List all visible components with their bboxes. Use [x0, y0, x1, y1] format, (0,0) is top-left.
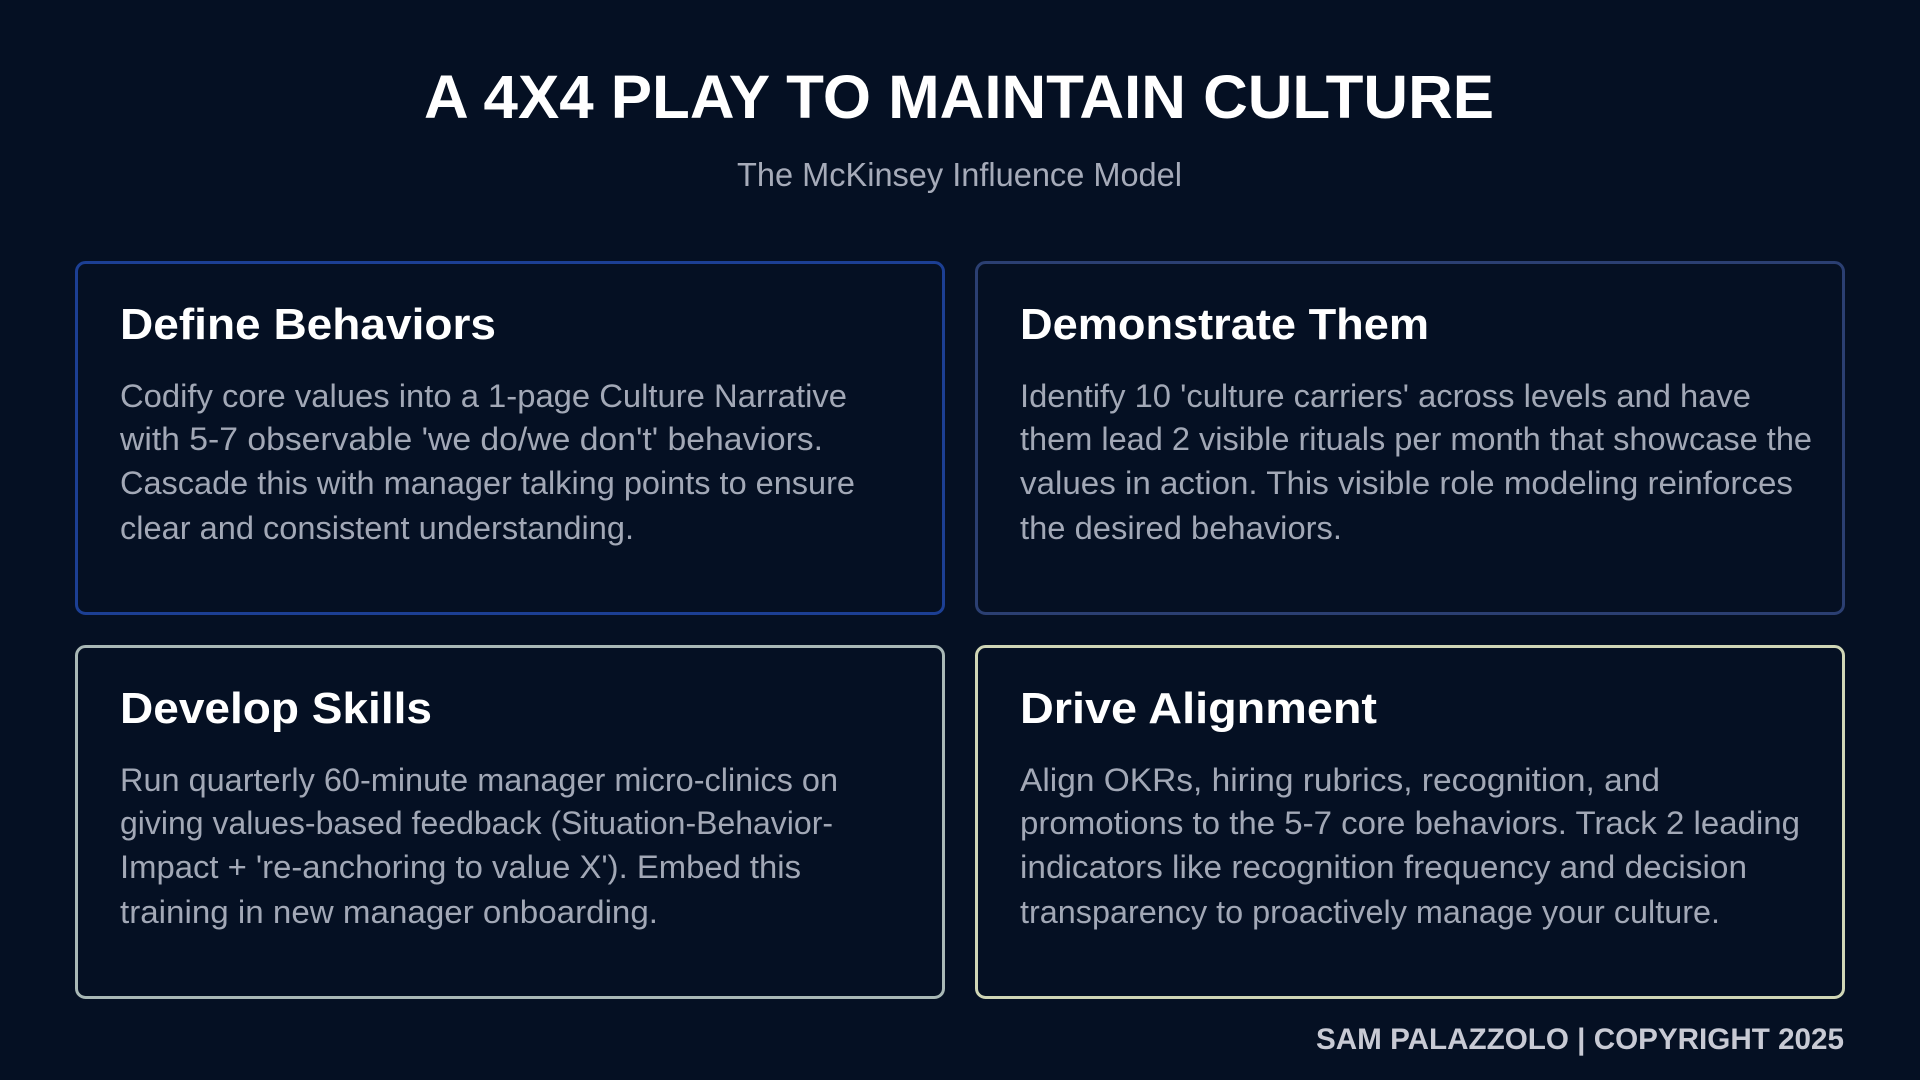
heading: drive alignment: Drive Alignment: [1020, 684, 1377, 733]
text block: define behaviors: with 5-7 observable 'we do/we don't' behaviors.: [119, 421, 823, 457]
text block: demonstrate them: them lead 2 visible rituals per month that showcase the: [1020, 421, 1812, 457]
panel: drive alignment: [976, 646, 1844, 998]
text block: develop skills: [120, 762, 838, 930]
text block: demonstrate them: Identify 10 'culture carriers' across levels and have: [1020, 378, 1751, 414]
panel: demonstrate them: [976, 262, 1844, 614]
text block: drive alignment: transparency to proactively manage your culture.: [1020, 894, 1720, 930]
text block: demonstrate them: values in action. This visible role modeling reinforces: [1020, 465, 1793, 501]
text block: drive alignment: indicators like recognition frequency and decision: [1020, 849, 1747, 885]
heading: develop skills: Develop Skills: [120, 684, 432, 733]
text block: develop skills: Impact + 're-anchoring to value X'). Embed this: [120, 849, 801, 885]
text block: define behaviors: clear and consistent understanding.: [120, 510, 634, 546]
heading: demonstrate them: Demonstrate Them: [1020, 300, 1429, 349]
text block: develop skills: Run quarterly 60-minute manager micro-clinics on: [120, 762, 838, 798]
text block: demonstrate them: the desired behaviors.: [1020, 510, 1342, 546]
text block: develop skills: giving values-based feedback (Situation-Behavior-: [120, 805, 833, 841]
text block: define behaviors: Cascade this with manager talking points to ensure: [120, 465, 855, 501]
heading: define behaviors: Define Behaviors: [120, 300, 496, 349]
text block: drive alignment: Align OKRs, hiring rubrics, recognition, and: [1020, 762, 1660, 798]
text block: develop skills: training in new manager onboarding.: [120, 894, 658, 930]
subtitle: The McKinsey Influence Model: [737, 156, 1182, 193]
title: A 4X4 PLAY TO MAINTAIN CULTURE: [424, 63, 1494, 131]
panel: develop skills: [76, 646, 944, 998]
text block: drive alignment: promotions to the 5-7 core behaviors. Track 2 leading: [1020, 805, 1800, 841]
panel: define behaviors: [76, 262, 944, 614]
text block: define behaviors: [119, 378, 855, 546]
text block: drive alignment: [1020, 762, 1800, 930]
text block: demonstrate them: [1020, 378, 1812, 546]
footer: SAM PALAZZOLO | COPYRIGHT 2025: [1316, 1023, 1844, 1056]
text block: define behaviors: Codify core values into a 1-page Culture Narrative: [120, 378, 847, 414]
